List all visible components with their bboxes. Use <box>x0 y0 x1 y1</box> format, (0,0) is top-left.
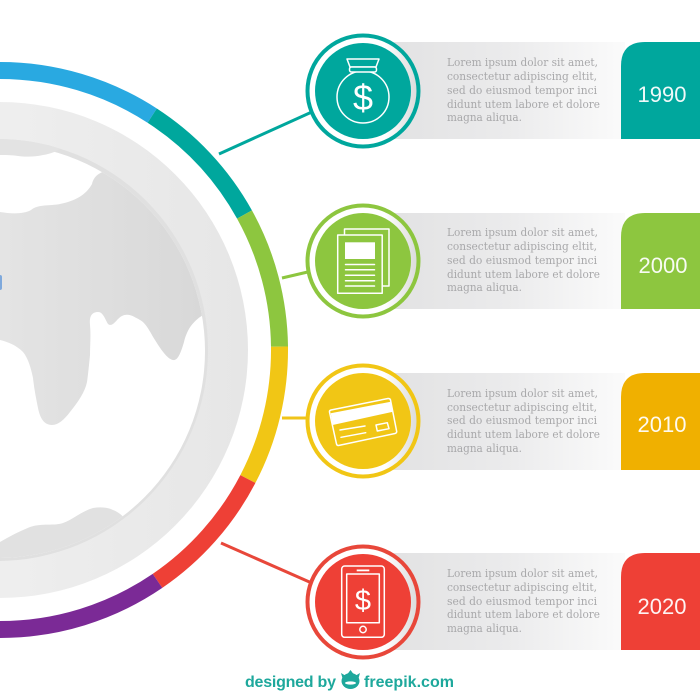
medallion <box>306 34 420 148</box>
icon: smartphone payment <box>342 566 384 637</box>
body text: magna aliqua. <box>447 622 522 635</box>
text band <box>363 553 625 650</box>
body text: Lorem ipsum dolor sit amet, <box>447 226 598 239</box>
icon: freepik mascot <box>341 670 360 689</box>
year label: 2000 <box>639 253 687 278</box>
panel: 2010 <box>306 364 700 478</box>
body text: magna aliqua. <box>447 442 522 455</box>
panel: 2000 <box>306 204 700 318</box>
medallion <box>306 364 420 478</box>
connector: 2000 <box>282 271 312 278</box>
icon: money bag <box>337 59 389 123</box>
body text: magna aliqua. <box>447 111 522 124</box>
year tab <box>621 42 700 139</box>
body text: Lorem ipsum dolor sit amet, <box>447 56 598 69</box>
body text: didunt utem labore et dolore <box>447 608 600 621</box>
ring segment: purple <box>0 581 158 630</box>
body text: Lorem ipsum dolor sit amet, <box>447 387 598 400</box>
text band <box>363 213 625 309</box>
year tab <box>621 553 700 650</box>
world map land <box>0 170 215 425</box>
freepik.com text: freepik.com <box>364 674 454 691</box>
body text: consectetur adipiscing eltit, <box>447 581 597 594</box>
connector: 2020 <box>221 543 314 584</box>
ring segment: yellow <box>248 347 280 479</box>
globe outer light ring <box>0 102 248 598</box>
year label: 1990 <box>638 82 686 107</box>
body text: didunt utem labore et dolore <box>447 428 600 441</box>
body text <box>447 567 600 635</box>
designed by text: designed by <box>245 674 336 691</box>
body text: sed do eiusmod tempor inci <box>447 414 598 427</box>
medallion <box>306 204 420 318</box>
icon: credit card <box>329 398 397 446</box>
body text: consectetur adipiscing eltit, <box>447 401 597 414</box>
body text: sed do eiusmod tempor inci <box>447 254 598 267</box>
year tab <box>621 373 700 470</box>
globe white disc <box>0 144 205 558</box>
ring segment: red <box>158 479 248 581</box>
text band <box>363 373 625 470</box>
map bottom landmass <box>0 508 122 558</box>
blue map marker <box>0 275 2 290</box>
ring segment: blue <box>0 70 152 116</box>
connector: 2010 <box>282 416 312 420</box>
body text: consectetur adipiscing eltit, <box>447 70 597 83</box>
year label: 2020 <box>638 594 686 619</box>
icon: money bag: $ <box>353 77 373 118</box>
body text: Lorem ipsum dolor sit amet, <box>447 567 598 580</box>
body text <box>447 56 600 124</box>
body text: consectetur adipiscing eltit, <box>447 240 597 253</box>
globe <box>0 102 248 598</box>
body text: didunt utem labore et dolore <box>447 98 600 111</box>
globe shadow crescent <box>0 139 208 561</box>
body text: sed do eiusmod tempor inci <box>447 84 598 97</box>
body text <box>447 387 600 455</box>
medallion <box>306 544 420 660</box>
connector: 1990 <box>219 111 314 154</box>
footer credit <box>245 670 454 691</box>
text band <box>363 42 625 139</box>
icon: smartphone payment: $ <box>355 585 371 617</box>
icon: newspapers <box>338 229 389 293</box>
body text: didunt utem labore et dolore <box>447 268 600 281</box>
panel: 1990 <box>306 34 700 148</box>
year tab <box>621 213 700 309</box>
map top cap <box>0 144 54 156</box>
segmented outer ring <box>0 70 280 630</box>
body text <box>447 226 600 294</box>
ring segment: teal <box>152 116 244 214</box>
body text: magna aliqua. <box>447 281 522 294</box>
year label: 2010 <box>638 412 686 437</box>
panel: 2020 <box>306 544 700 660</box>
ring segment: green <box>244 214 280 347</box>
body text: sed do eiusmod tempor inci <box>447 595 598 608</box>
